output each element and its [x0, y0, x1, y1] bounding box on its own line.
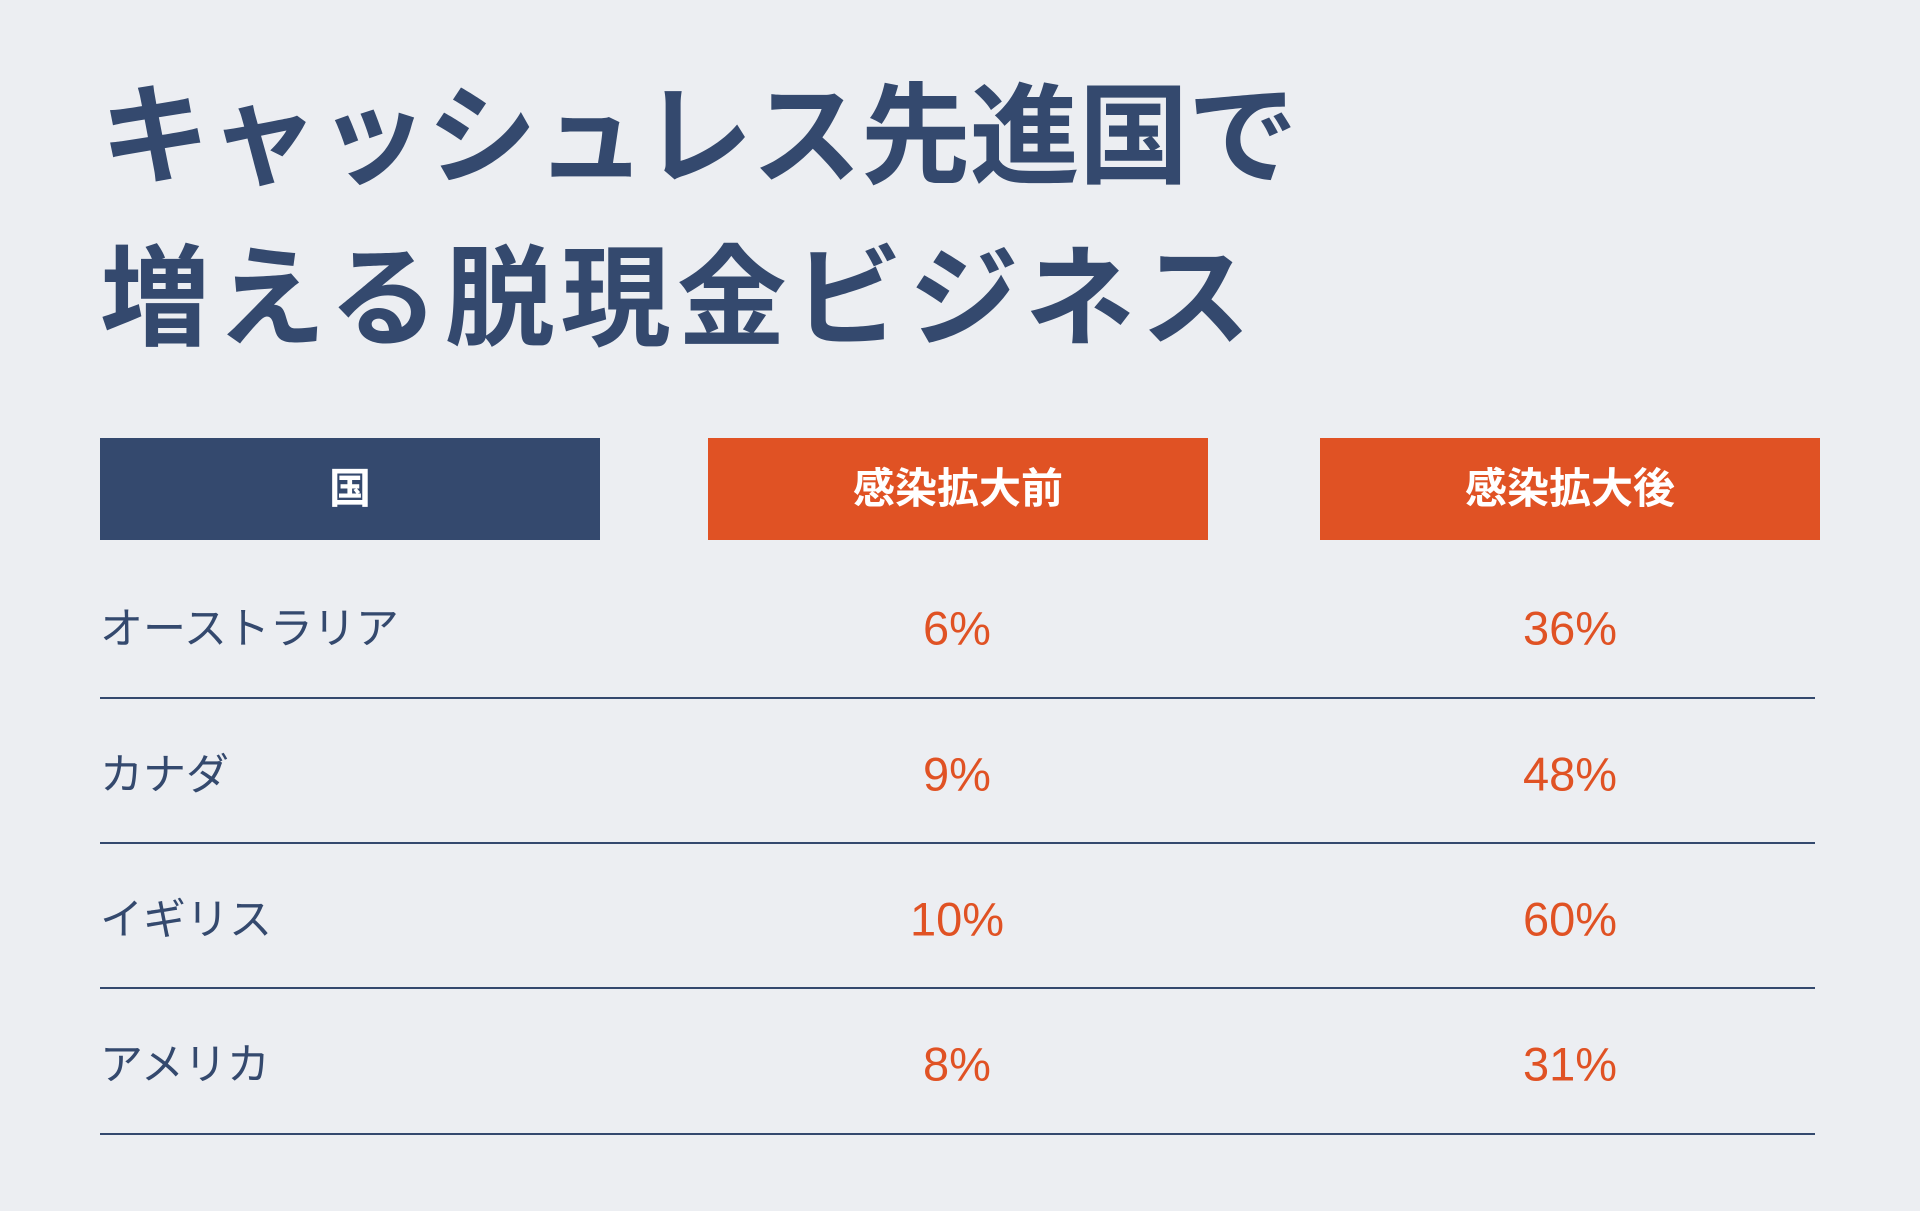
header: before — [708, 438, 1208, 540]
header: after — [1320, 438, 1820, 540]
row: Canada: カナダ — [100, 752, 229, 800]
row: UK: イギリス — [100, 896, 272, 944]
title: キャッシュレス先進国で — [100, 76, 1297, 199]
header: country: 国 — [329, 464, 371, 512]
row: USA — [100, 1038, 1815, 1135]
row: Australia: 36% — [1523, 602, 1617, 654]
row: Canada — [100, 748, 1815, 844]
row: Australia — [100, 602, 1815, 699]
row: Canada: 9% — [923, 748, 991, 800]
row: UK: 10% — [910, 892, 1004, 946]
row: Canada: 48% — [1523, 748, 1617, 800]
row: USA: 31% — [1523, 1038, 1617, 1090]
title — [100, 76, 1297, 361]
row: UK: 60% — [1523, 892, 1617, 946]
row: Australia: 6% — [923, 602, 991, 654]
row: USA: 8% — [923, 1038, 991, 1090]
title: 増える脱現金ビジネス — [100, 238, 1257, 361]
row: Australia: オーストラリア — [100, 606, 399, 654]
row: USA: アメリカ — [100, 1042, 270, 1090]
header: after: 感染拡大後 — [1465, 464, 1675, 512]
row: UK — [100, 892, 1815, 989]
header: before: 感染拡大前 — [853, 464, 1063, 512]
header: country — [100, 438, 600, 540]
